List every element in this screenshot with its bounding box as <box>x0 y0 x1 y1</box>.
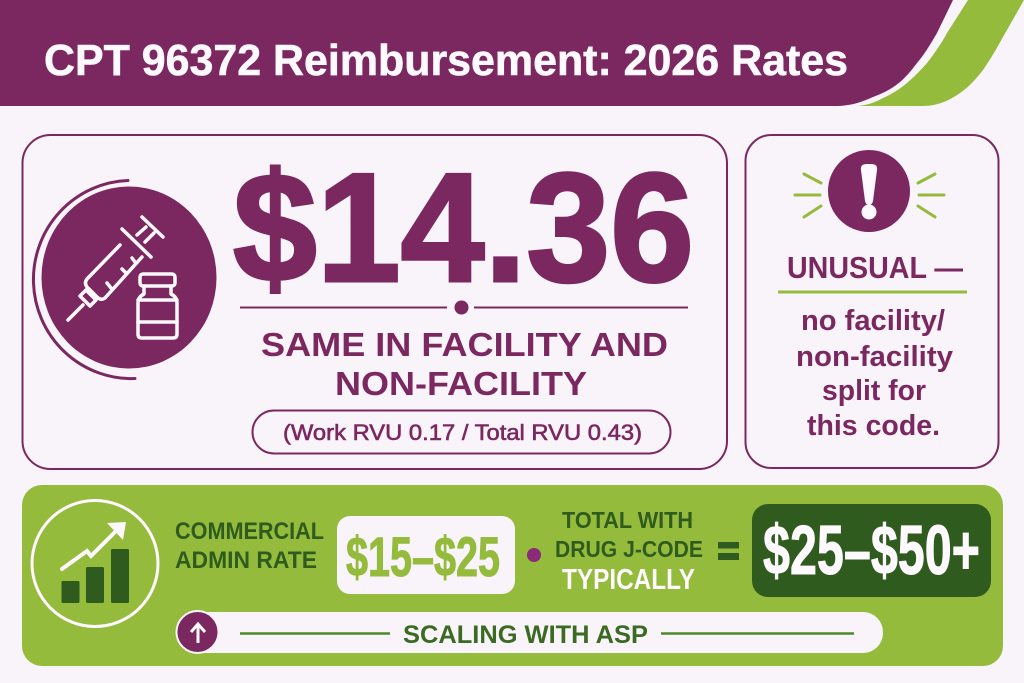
note text: non-facility <box>796 341 953 373</box>
icon: growth chart <box>32 500 158 626</box>
panel: main rate <box>22 135 727 469</box>
total label: DRUG J-CODE <box>555 536 703 562</box>
subheading: NON-FACILITY <box>335 365 587 402</box>
divider with dot <box>240 300 688 314</box>
commercial value <box>337 516 515 594</box>
commercial value: $15–$25 <box>346 525 500 588</box>
subheading: SAME IN FACILITY AND <box>261 326 668 363</box>
commercial label <box>175 518 324 574</box>
panel: commercial rates <box>22 485 1003 666</box>
commercial label: ADMIN RATE <box>175 547 317 574</box>
RVU pill <box>252 410 670 454</box>
total label: TYPICALLY <box>562 564 695 596</box>
subheading <box>261 326 668 402</box>
note text <box>796 305 953 442</box>
total label: TOTAL WITH <box>562 507 693 533</box>
note text: no facility/ <box>801 305 945 337</box>
equals sign <box>718 542 739 560</box>
total label <box>555 507 703 596</box>
unusual label: UNUSUAL — <box>787 250 963 285</box>
title: CPT 96372 Reimbursement: 2026 Rates <box>44 36 848 85</box>
note text: this code. <box>807 410 940 442</box>
icon: up arrow <box>176 611 218 653</box>
icon: exclamation with rays <box>795 150 944 232</box>
icon: syringe and vial <box>33 180 216 379</box>
header banner <box>0 0 1024 106</box>
scaling bar <box>176 611 883 653</box>
RVU pill: (Work RVU 0.17 / Total RVU 0.43) <box>283 420 642 445</box>
panel: unusual note <box>746 135 998 468</box>
note text: split for <box>822 375 926 407</box>
scaling bar: SCALING WITH ASP <box>403 621 648 649</box>
dot separator <box>527 548 541 562</box>
big amount: $14.36 <box>233 141 694 314</box>
green swoosh <box>858 0 1024 106</box>
commercial label: COMMERCIAL <box>175 518 324 545</box>
